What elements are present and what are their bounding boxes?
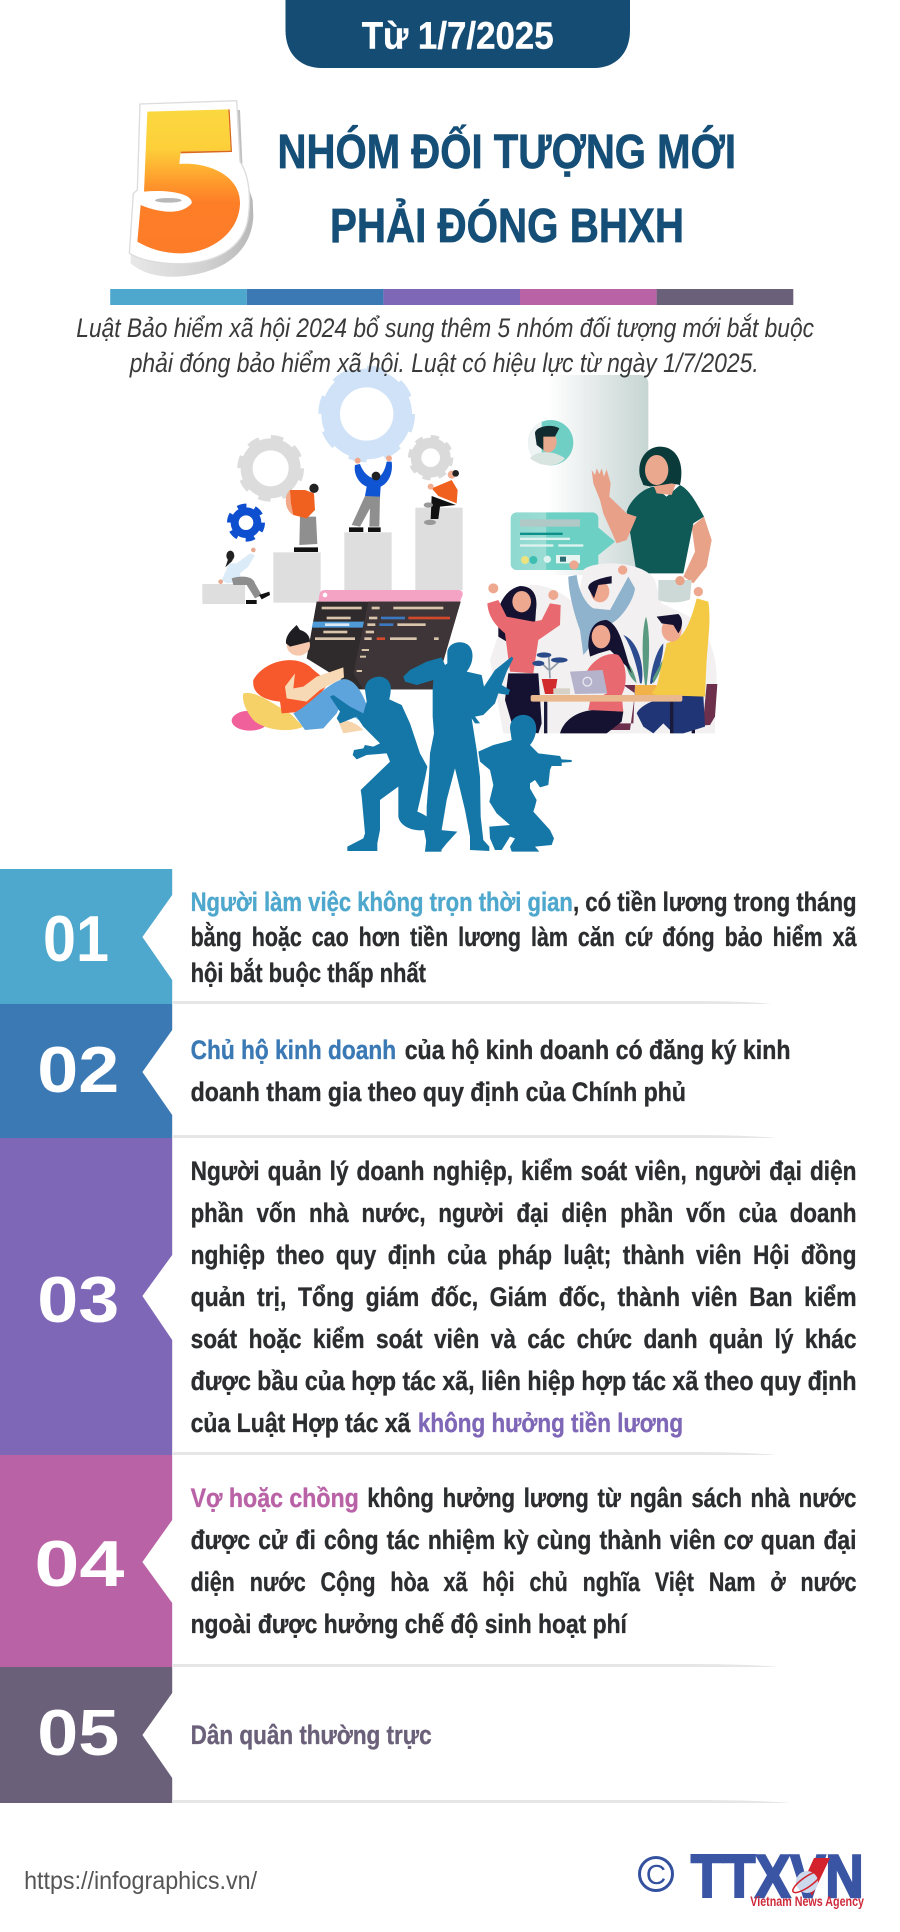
steps	[202, 508, 463, 604]
text 02: của hộ kinh doanh có đăng ký kinh	[405, 1035, 790, 1065]
big light-blue gear	[323, 370, 411, 458]
logo: TTXVN: TTXVN	[691, 1843, 864, 1910]
text 03: không hưởng tiền lương	[418, 1408, 683, 1438]
item 04	[0, 1455, 856, 1667]
window	[307, 590, 463, 689]
backdrop panel	[548, 375, 648, 575]
intro text: phải đóng bảo hiểm xã hội. Luật có hiệu lực từ ngày 1/7/2025.	[129, 348, 759, 378]
text 02: Chủ hộ kinh doanh	[191, 1035, 396, 1065]
number 02: 02	[37, 1033, 119, 1106]
woman	[592, 447, 712, 583]
figure: woman on top step	[424, 470, 459, 525]
date banner: Từ 1/7/2025	[362, 16, 554, 58]
figure: orange man	[286, 484, 319, 552]
number 05: 05	[37, 1696, 119, 1769]
icon: big number 5	[129, 101, 253, 277]
copyright mark: C	[646, 1859, 666, 1890]
item 01	[0, 869, 857, 1004]
text 02	[191, 1035, 791, 1107]
table with laptop	[531, 652, 682, 733]
text 02: doanh tham gia theo quy định của Chính phủ	[191, 1077, 686, 1107]
text 04: Vợ hoặc chồng	[191, 1483, 359, 1513]
reader	[232, 625, 375, 733]
title: PHẢI ĐÓNG BHXH	[330, 198, 684, 253]
source url: https://infographics.vn/	[24, 1867, 257, 1895]
grey gear right	[411, 438, 451, 478]
back man	[568, 560, 635, 655]
title: NHÓM ĐỐI TƯỢNG MỚI	[278, 124, 736, 179]
date banner	[286, 0, 630, 68]
left woman	[487, 583, 561, 733]
figure: sitting woman	[218, 548, 270, 604]
text 05: Dân quân thường trực	[191, 1720, 432, 1750]
figure: man lifting gear	[349, 455, 392, 532]
text 03: của Luật Hợp tác xã	[191, 1408, 411, 1438]
item 02	[0, 1004, 790, 1138]
logo: TTXVN: Vietnam News Agency	[750, 1894, 864, 1909]
number 04: 04	[34, 1527, 124, 1600]
illustration: gears and steps	[202, 370, 463, 604]
item 05	[0, 1667, 790, 1803]
number 03: 03	[37, 1263, 119, 1336]
avatar	[528, 420, 573, 465]
item 03	[0, 1138, 856, 1455]
grey gear left	[241, 438, 301, 498]
number 01: 01	[43, 902, 109, 975]
seated woman	[560, 620, 635, 733]
text 01	[191, 887, 857, 988]
soldier crouching left	[330, 677, 457, 852]
illustration: code window and reader	[232, 590, 463, 733]
text 01: Người làm việc không trọn thời gian	[191, 887, 573, 917]
text 03	[191, 1156, 857, 1438]
text 01: hội bắt buộc thấp nhất	[191, 958, 426, 988]
speech card	[511, 512, 615, 570]
title	[278, 124, 736, 253]
colour bar	[110, 289, 793, 305]
intro text	[76, 313, 814, 378]
text 04: ngoài được hưởng chế độ sinh hoạt phí	[191, 1609, 628, 1639]
soldier kneeling	[478, 715, 572, 852]
copyright mark	[640, 1858, 672, 1890]
illustration: woman on video call	[511, 375, 712, 583]
plant	[623, 617, 663, 695]
illustration: cheering team at table	[487, 560, 717, 733]
text 04	[191, 1483, 857, 1639]
soldier saluting	[403, 642, 513, 852]
blue gear	[230, 507, 262, 539]
yellow man	[637, 587, 717, 733]
illustration: soldier silhouettes	[330, 642, 572, 852]
